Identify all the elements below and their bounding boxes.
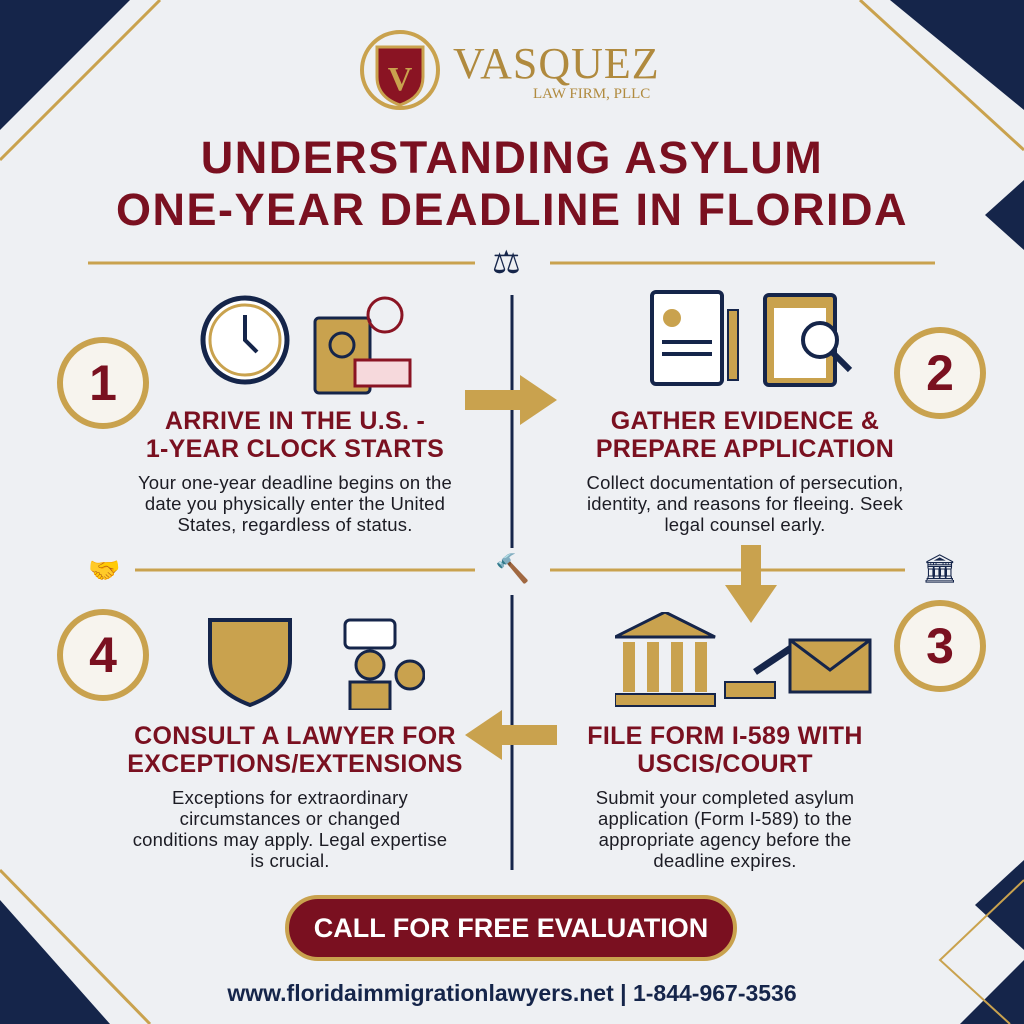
arrow left [465, 710, 557, 760]
title: ONE-YEAR DEADLINE IN FLORIDA [116, 184, 908, 235]
step 3: 3 [926, 618, 954, 674]
step 2: legal counsel early. [664, 514, 826, 535]
logo: LAW FIRM, PLLC [533, 86, 650, 102]
icon: courthouse: 🏛 [922, 553, 958, 584]
step 4: is crucial. [250, 850, 330, 871]
step 3: Submit your completed asylum [596, 787, 854, 808]
step 1: ARRIVE IN THE U.S. - [165, 407, 425, 435]
title [116, 132, 908, 235]
CTA button [285, 895, 737, 961]
step 1 [57, 296, 452, 535]
step 4: CONSULT A LAWYER FOR [134, 722, 456, 750]
step 2: 2 [926, 345, 954, 401]
step 2: PREPARE APPLICATION [596, 435, 894, 463]
step 2: GATHER EVIDENCE & [611, 407, 879, 435]
footer url: www.floridaimmigrationlawyers.net | 1-844-967-3536 [227, 980, 797, 1006]
step 2: Collect documentation of persecution, [587, 472, 903, 493]
step 2: identity, and reasons for fleeing. Seek [587, 493, 903, 514]
icon: scale: ⚖ [492, 244, 521, 280]
step 2 [587, 290, 986, 535]
step 1: date you physically enter the United [145, 493, 445, 514]
arrow down [725, 545, 777, 623]
step 4: Exceptions for extraordinary [172, 787, 408, 808]
step 4: conditions may apply. Legal expertise [133, 829, 447, 850]
icon: gavel: 🔨 [495, 553, 530, 584]
icon: handshake: 🤝 [88, 555, 120, 585]
step 3: application (Form I-589) to the [598, 808, 852, 829]
step 1: Your one-year deadline begins on the [138, 472, 452, 493]
step 1: 1-YEAR CLOCK STARTS [146, 435, 444, 463]
step 4 [57, 609, 463, 871]
step 4: 4 [89, 627, 117, 683]
step 3: appropriate agency before the [599, 829, 851, 850]
step 3: USCIS/COURT [637, 750, 813, 778]
arrow right [465, 375, 557, 425]
logo: V [388, 61, 413, 98]
logo [360, 30, 660, 110]
step 3: FILE FORM I-589 WITH [587, 722, 863, 750]
step 1: States, regardless of status. [177, 514, 413, 535]
step 1: 1 [89, 355, 117, 411]
step 3 [587, 600, 986, 871]
logo: VASQUEZ [453, 39, 660, 88]
title: UNDERSTANDING ASYLUM [201, 132, 823, 183]
step 4: circumstances or changed [180, 808, 400, 829]
step 3: deadline expires. [653, 850, 797, 871]
step 4: EXCEPTIONS/EXTENSIONS [127, 750, 463, 778]
CTA button: CALL FOR FREE EVALUATION [314, 913, 708, 943]
